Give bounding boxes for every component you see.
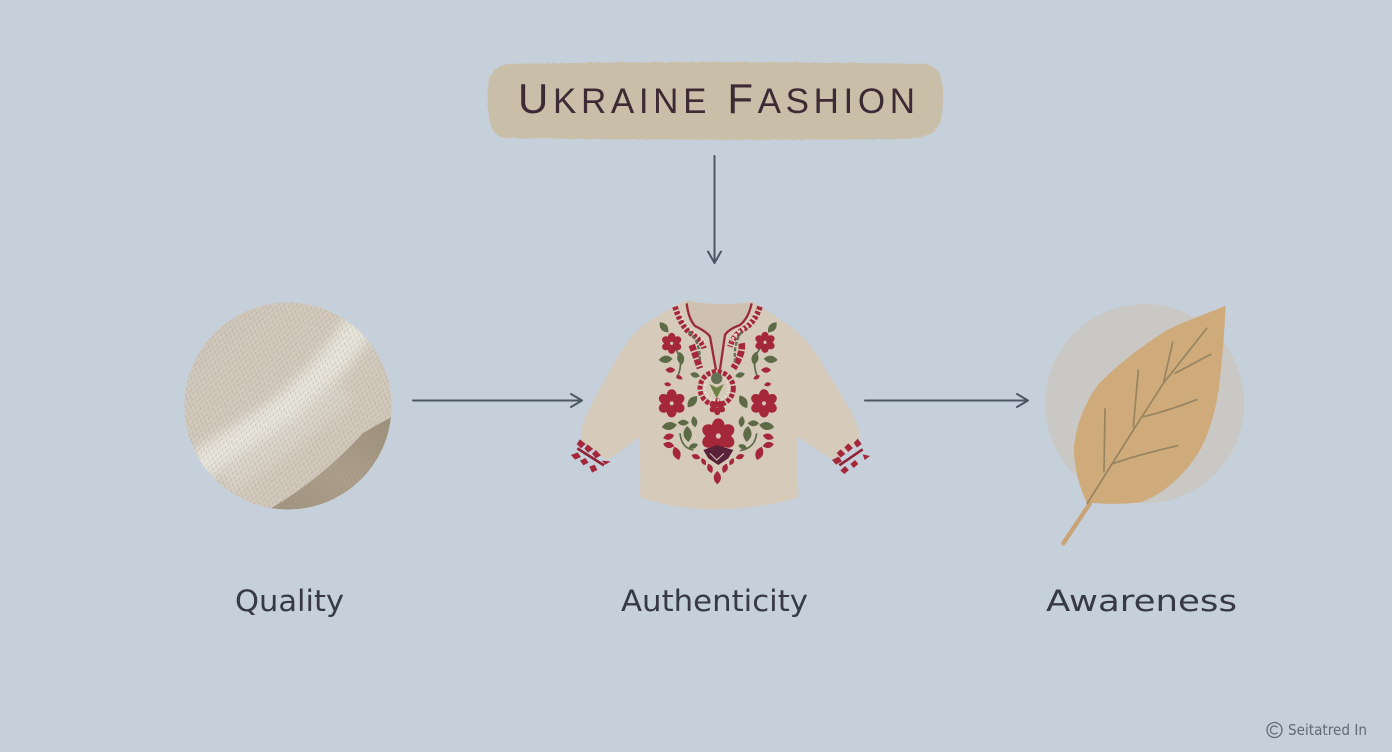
banner shape: [488, 62, 943, 140]
right cuff: [832, 439, 870, 474]
neck opening shade: [687, 301, 752, 369]
arrow: authenticity to awareness: [865, 394, 1028, 407]
panel: embroidered blouse: [571, 300, 870, 509]
flowers: [661, 333, 683, 354]
watermark text: Seitatred In: [1288, 721, 1367, 739]
leaf veins: [1087, 328, 1211, 503]
leaf stem: [1063, 503, 1090, 543]
arrow: quality to authenticity: [413, 394, 582, 407]
leaf blade: [1074, 306, 1226, 504]
red leaves: [665, 367, 675, 373]
arrow: title to blouse: [708, 156, 721, 263]
label: Quality: Quality: [235, 584, 344, 618]
dark flower centre: [703, 445, 733, 465]
centre medallion: [700, 372, 733, 405]
copyright icon: [1267, 722, 1282, 738]
title text: UKRAINE FASHION: [518, 75, 915, 122]
panel: quality fabric swatch: [184, 302, 392, 510]
backdrop circle: [1045, 304, 1244, 503]
label: Awareness: Awareness: [1046, 584, 1237, 618]
vine stems: [675, 348, 760, 451]
left cuff: [571, 439, 611, 473]
title banner: [488, 62, 943, 140]
collar embroidery: [675, 303, 760, 370]
watermark: [1267, 721, 1367, 739]
label: Authenticity: Authenticity: [621, 584, 808, 618]
blouse body: [581, 300, 860, 509]
green leaves: [657, 320, 671, 335]
panel: awareness leaf: [1045, 304, 1244, 543]
